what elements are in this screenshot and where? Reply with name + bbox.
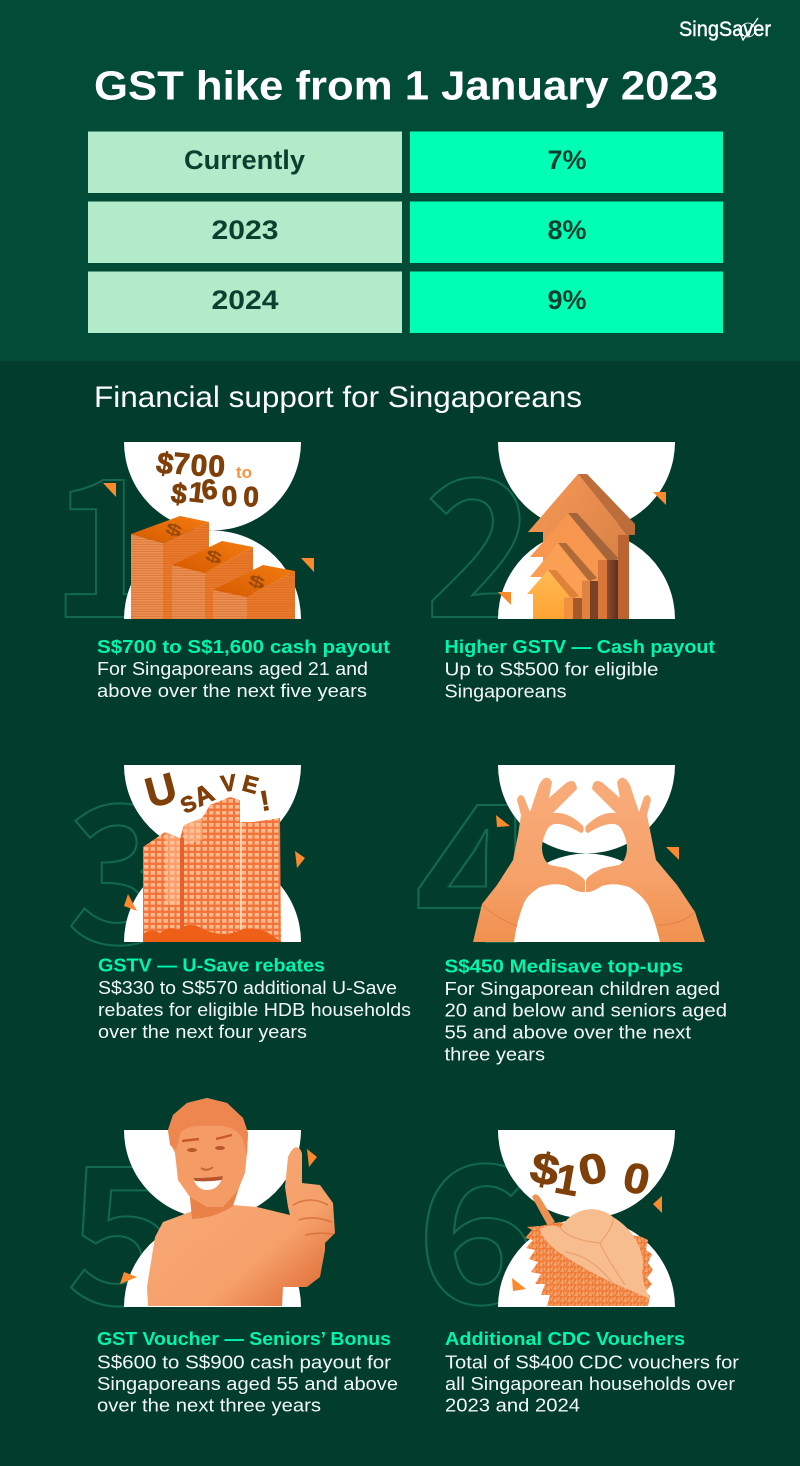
accents: [120, 1149, 317, 1284]
accents: [512, 1196, 662, 1291]
caption: three years: [444, 1044, 545, 1064]
numeral 3: 3: [66, 723, 181, 998]
caption: Additional CDC Vouchers: [445, 1328, 685, 1349]
caption: rebates for eligible HDB households: [98, 999, 411, 1020]
hourglass: [498, 1130, 675, 1307]
panel 5: seniors' bonus: [66, 1084, 398, 1416]
$100 lettering: $: [526, 1143, 564, 1197]
USAVE lettering: A: [189, 777, 219, 812]
$100 lettering: [526, 1143, 654, 1205]
numeral 6: 6: [416, 1083, 538, 1358]
caption: S$700 to S$1,600 cash payout: [97, 636, 390, 657]
header band: [0, 0, 800, 361]
caption: For Singaporean children aged: [444, 978, 720, 999]
caption: [444, 956, 727, 1064]
section heading: Financial support for Singaporeans: [94, 381, 582, 414]
building: [143, 797, 281, 942]
$100 lettering: 0: [619, 1154, 654, 1205]
caption: S$330 to S$570 additional U-Save: [98, 977, 397, 998]
senior man with thumbs up: [147, 1098, 335, 1306]
amount text: $1600: [169, 473, 259, 513]
USAVE lettering: V: [219, 769, 239, 797]
hourglass: [498, 765, 675, 942]
caption: Singaporeans: [444, 680, 566, 702]
numeral 4: 4: [414, 722, 540, 997]
caption: [445, 1328, 739, 1416]
USAVE lettering: E: [240, 770, 261, 799]
caption: all Singaporean households over: [445, 1373, 735, 1394]
title: GST hike from 1 January 2023: [94, 62, 718, 108]
caption: [444, 636, 715, 702]
money stacks: $: [163, 519, 185, 542]
caption: S$450 Medisave top-ups: [444, 956, 683, 976]
USAVE lettering: [140, 763, 272, 819]
accents: [496, 815, 679, 860]
panel 2: higher GSTV: [424, 397, 715, 702]
numeral 1: 1: [50, 397, 162, 672]
panel 6: CDC vouchers: [416, 1083, 739, 1416]
row: 2024: 2024: [212, 285, 278, 315]
row: 2023: 2023: [212, 215, 278, 245]
accents: [498, 492, 666, 605]
money stacks: $: [203, 546, 225, 569]
panel 4: Medisave top-ups: [414, 722, 727, 1064]
caption: For Singaporeans aged 21 and: [97, 658, 368, 679]
row: currently: [88, 132, 723, 193]
panel 1: cash payout: [50, 397, 390, 701]
USAVE lettering: U: [140, 763, 182, 817]
row: 2024: [88, 272, 723, 333]
caption: 2023 and 2024: [445, 1394, 580, 1416]
durian: [525, 1194, 653, 1306]
rising arrows: [527, 474, 635, 619]
logo: SingSaver: SingSaver: [679, 18, 771, 41]
hourglass: [124, 1130, 301, 1307]
caption: above over the next five years: [97, 680, 367, 701]
caption: GSTV — U-Save rebates: [98, 954, 325, 976]
amount text: $700: [154, 446, 226, 484]
caption: [98, 954, 411, 1042]
accents: [103, 483, 314, 572]
hourglass: [124, 765, 301, 942]
caption: Singaporeans aged 55 and above: [97, 1373, 398, 1394]
caption: Total of S$400 CDC vouchers for: [445, 1352, 739, 1372]
caption: over the next three years: [97, 1394, 321, 1416]
caption: S$600 to S$900 cash payout for: [97, 1352, 391, 1372]
caption: [97, 1328, 398, 1416]
USAVE lettering: S: [177, 790, 200, 819]
caption: [97, 636, 390, 701]
amount text: [154, 446, 259, 513]
money stacks: $: [246, 571, 268, 594]
caption: GST Voucher — Seniors’ Bonus: [97, 1328, 391, 1349]
accents: [124, 851, 305, 911]
caption: 20 and below and seniors aged: [444, 1000, 727, 1020]
caption: over the next four years: [98, 1021, 307, 1042]
table: GST rates: [88, 132, 723, 333]
caption: 55 and above over the next: [444, 1022, 691, 1042]
numeral 5: 5: [66, 1084, 181, 1359]
hourglass: [124, 442, 301, 619]
caption: Up to S$500 for eligible: [444, 658, 658, 680]
USAVE lettering: !: [258, 785, 272, 817]
hourglass: [498, 442, 675, 619]
caption: Higher GSTV — Cash payout: [444, 636, 715, 657]
row: currently: 7%: [548, 145, 586, 175]
numeral 2: 2: [424, 397, 536, 672]
$100 lettering: 0: [574, 1143, 611, 1195]
amount text: to: [236, 463, 252, 482]
$100 lettering: 1: [551, 1155, 583, 1205]
money stacks: [131, 516, 295, 619]
row: 2023: 8%: [548, 215, 586, 245]
row: 2023: [88, 202, 723, 263]
row: 2024: 9%: [548, 285, 586, 315]
heart hands: [473, 778, 705, 942]
panel 3: U-Save rebates: [66, 723, 411, 1042]
row: currently: Currently: [184, 145, 305, 175]
